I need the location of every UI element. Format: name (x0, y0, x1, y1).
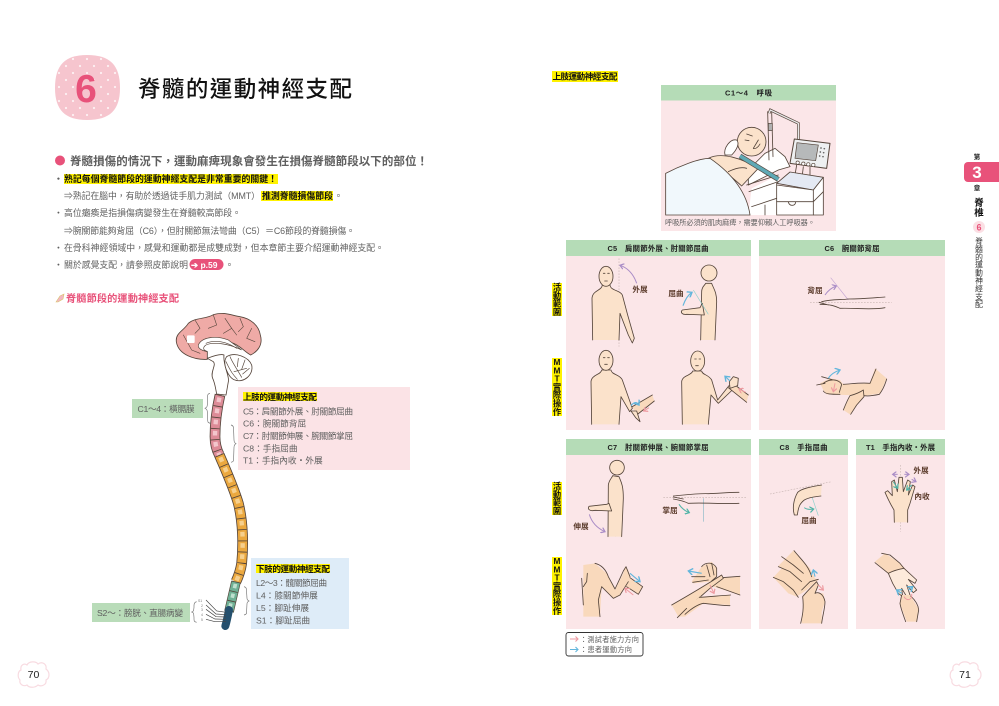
panel: upper limb motor innervation: C7：肘關節伸展、腕關節掌屈 (243, 430, 353, 441)
brain and spinal cord diagram (176, 313, 261, 626)
chapter side tab: 運 (975, 260, 983, 270)
legend: arrow meanings (566, 632, 643, 656)
bullet list: ⇒腕關節能夠背屈（C6），但肘關節無法彎曲（C5）＝C6節段的脊髓損傷。 (64, 225, 355, 236)
side label: MMT practice (top): T (554, 374, 560, 384)
label: S2 bladder rectal (92, 603, 190, 622)
panel: upper limb motor innervation: T1：手指內收・外展 (243, 454, 323, 466)
chapter side tab: 經 (975, 283, 983, 293)
panel: T1 finger adduction and abduction: T1 手指內收・外展 (866, 443, 936, 452)
side label: MMT practice (top): 作 (553, 407, 562, 417)
figures: C5 (591, 258, 748, 424)
sacral labels: 4 (201, 613, 203, 617)
panel: upper limb motor innervation: 上肢的運動神經支配 (243, 391, 317, 402)
sacral labels: 2 (201, 604, 203, 608)
bullet list: ・ (54, 208, 63, 218)
figures: C8 (770, 482, 832, 623)
panel: C1-4 breathing: C1～4 呼吸 (725, 88, 773, 98)
panel: lower limb motor innervation: L5：腳趾伸展 (256, 602, 309, 613)
bullet list: 。 (334, 191, 343, 201)
bullet list: ・ (54, 174, 63, 184)
legend: arrow meanings: ：患者運動方向 (580, 645, 632, 654)
side label: range of motion (top) (552, 282, 562, 317)
bullet list: 關於感覺支配，請參照皮節說明 (64, 259, 188, 270)
sacral nerves (206, 600, 226, 622)
side label: MMT practice (bottom): 作 (553, 606, 562, 616)
bullet list: ・ (54, 260, 63, 270)
panel: lower limb motor innervation: S1：腳趾屈曲 (256, 614, 310, 626)
label: abduction: 外展 (913, 465, 929, 475)
side label: MMT practice (top): M (554, 357, 561, 367)
panel: C6 wrist extension (759, 240, 945, 430)
chapter side tab: 配 (975, 300, 983, 309)
label: S2 bladder rectal: S2～：膀胱、直腸病變 (97, 607, 183, 618)
label: dorsiflexion: 背屈 (807, 285, 823, 295)
chapter number badge (55, 55, 120, 120)
chapter number badge: 6 (75, 68, 97, 111)
chapter side tab: 章 (974, 183, 981, 192)
side label: range of motion (top): 動 (553, 290, 561, 300)
panel: upper limb motor innervation: C5：肩關節外展、肘關節屈曲 (243, 406, 353, 416)
panel: upper limb motor innervation (238, 387, 410, 470)
panel: upper limb motor innervation: C6：腕關節背屈 (243, 418, 306, 428)
chapter side tab: 髓 (975, 244, 983, 254)
panel: C7 elbow extension, wrist flexion: C7 肘關節伸展、腕關節掌屈 (608, 443, 708, 452)
side label: range of motion (bottom): 活 (553, 481, 562, 491)
chapter side tab: 動 (975, 269, 983, 278)
side label: range of motion (top): 活 (553, 282, 562, 292)
panel: C1-4 breathing (661, 85, 836, 231)
sacral labels (198, 599, 203, 622)
title: 脊髓的運動神經支配 (138, 77, 352, 102)
bullet list (54, 173, 384, 270)
figures: T1 (875, 465, 919, 622)
heading: upper limb motor innervation: 上肢運動神經支配 (552, 70, 618, 82)
page number 71: 71 (959, 669, 971, 681)
side label: MMT practice (bottom): 際 (553, 589, 562, 599)
bullet list: ➔ p.59 (191, 260, 218, 270)
label: abduction: 外展 (632, 284, 648, 294)
label: flexion: 屈曲 (801, 515, 817, 525)
chapter side tab: 第 (974, 152, 981, 161)
side label: MMT practice (bottom): 操 (553, 598, 562, 608)
side label: MMT practice (top): 際 (553, 390, 562, 400)
bullet list: 熟記每個脊髓節段的運動神經支配是非常重要的關鍵！ (64, 173, 277, 184)
bullet list: 在骨科神經領域中，感覺和運動都是成雙成對，但本章節主要介紹運動神經支配。 (64, 242, 384, 253)
sacral labels: S1 (198, 599, 202, 603)
figures: C6 (810, 278, 892, 414)
side label: range of motion (bottom) (552, 481, 562, 516)
panel: upper limb motor innervation: C8：手指屈曲 (243, 442, 298, 454)
side label: range of motion (bottom): 圍 (553, 506, 561, 516)
panel: lower limb motor innervation: 下肢的運動神經支配 (256, 563, 330, 574)
sacral labels: 5 (201, 618, 203, 622)
panel: lower limb motor innervation (251, 558, 349, 629)
chapter side tab: 椎 (974, 207, 984, 219)
chapter side tab: 支 (975, 291, 983, 301)
bullet list: 高位癱瘓是指損傷病變發生在脊髓較高節段。 (64, 207, 241, 218)
side label: MMT practice (bottom): 實 (553, 581, 561, 591)
panel: C5 shoulder abduction, elbow flexion: C5 肩關節外展、肘關節屈曲 (608, 244, 708, 253)
page number 70 (18, 662, 49, 687)
chapter side tab: 脊 (975, 236, 983, 246)
panel: lower limb motor innervation: L2～3：髖關節屈曲 (256, 577, 327, 588)
label: adduction: 內收 (914, 491, 930, 501)
cerebellum (225, 355, 252, 381)
side label: MMT practice (top): M (554, 365, 561, 375)
panel: T1 finger adduction and abduction (856, 439, 945, 629)
side label: range of motion (top): 圍 (553, 307, 561, 317)
label: C1-4 diaphragm (132, 399, 203, 418)
label: flexion: 屈曲 (668, 288, 684, 298)
bullet list: ・ (54, 243, 63, 253)
side label: range of motion (bottom): 動 (553, 489, 561, 499)
chapter side tab (964, 152, 999, 309)
brainstem (207, 355, 229, 395)
braces (191, 393, 249, 622)
figures: C7 (582, 460, 747, 618)
panel: C8 finger flexion (759, 439, 848, 629)
side label: MMT practice (bottom): T (554, 573, 560, 583)
chapter side tab: 的 (975, 252, 983, 262)
sacral labels: 3 (201, 608, 203, 612)
side label: MMT practice (top) (552, 357, 562, 417)
side label: MMT practice (top): 實 (553, 382, 561, 392)
side label: MMT practice (bottom) (552, 556, 562, 616)
panel: C7 elbow extension, wrist flexion (566, 439, 751, 629)
panel: C8 finger flexion: C8 手指屈曲 (780, 443, 828, 452)
section heading: spinal segments: 脊髓節段的運動神經支配 (66, 292, 179, 305)
panel: lower limb motor innervation: L4：膝關節伸展 (256, 590, 318, 600)
chapter side tab: 6 (976, 222, 982, 232)
caption: 呼吸所必須的肌肉麻痺，需要仰賴人工呼吸器。 (665, 218, 815, 227)
label: extension: 伸展 (573, 521, 589, 531)
spinal column (215, 395, 243, 626)
panel: C5 shoulder abduction, elbow flexion (566, 240, 751, 430)
illustration: patient on ventilator (666, 110, 830, 215)
page number 70: 70 (28, 669, 39, 681)
side label: range of motion (top): 範 (553, 299, 562, 309)
side label: MMT practice (bottom): M (554, 564, 561, 574)
chapter side tab: 神 (975, 276, 983, 286)
brain (176, 313, 261, 359)
label: C1-4 diaphragm: C1～4：橫膈膜 (138, 403, 195, 414)
legend: arrow meanings: ：測試者施力方向 (580, 635, 639, 644)
side label: range of motion (bottom): 範 (553, 498, 562, 508)
bullet list: 。 (225, 260, 234, 270)
label: palmar flexion: 掌屈 (662, 505, 678, 515)
chapter side tab: 脊 (974, 197, 984, 209)
side label: MMT practice (top): 操 (553, 398, 562, 408)
page number 71 (950, 662, 981, 687)
bullet list: ⇒熟記在腦中，有助於透過徒手肌力測試（MMT） (64, 190, 260, 201)
key point heading: 脊髓損傷的情況下，運動麻痺現象會發生在損傷脊髓節段以下的部位！ (70, 154, 428, 168)
bullet list: 推測脊髓損傷節段 (262, 190, 333, 201)
side label: MMT practice (bottom): M (554, 556, 561, 566)
chapter side tab: 3 (972, 163, 982, 182)
panel: C6 wrist extension: C6 腕關節背屈 (824, 244, 880, 253)
